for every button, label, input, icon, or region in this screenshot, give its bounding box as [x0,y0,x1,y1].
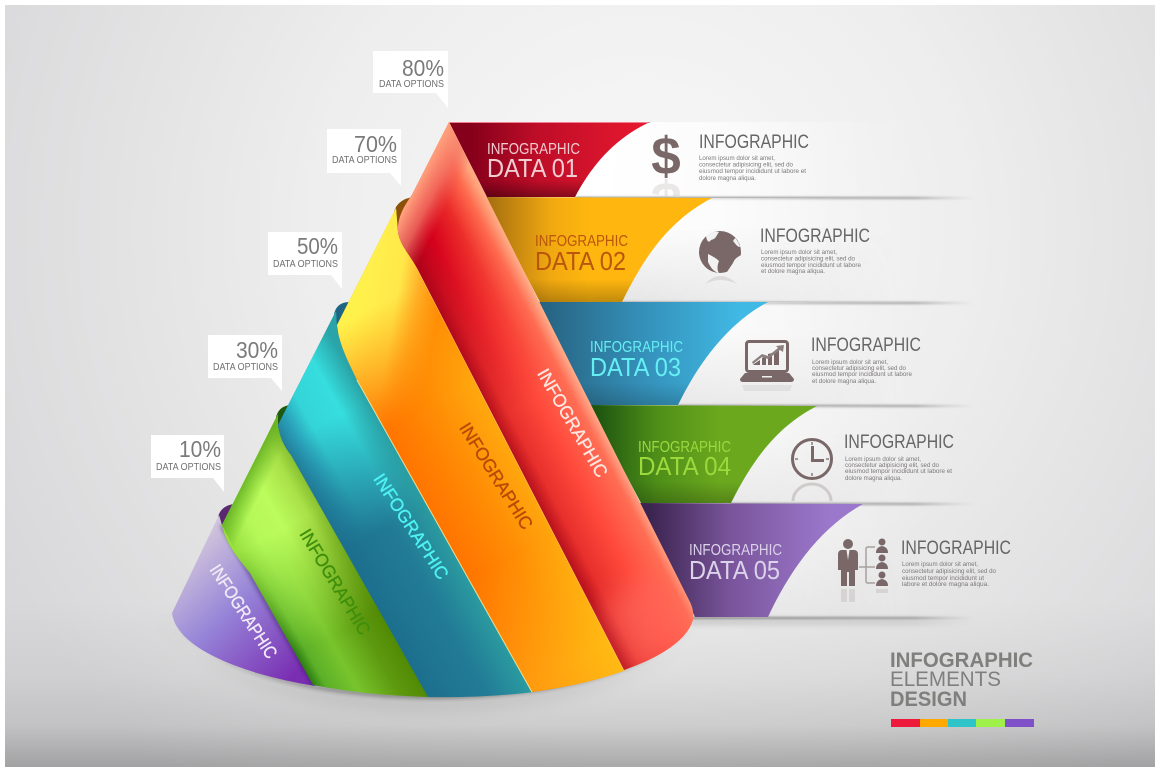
text block 1: consectetur adipisicing elit, sed do [699,162,794,168]
text block 1: eiusmod tempor incididunt ut labore et [699,168,806,175]
text block 2: et dolore magna aliqua. [761,268,825,275]
text block 4 [844,432,954,482]
text block 1 [699,132,809,182]
data 03 label [590,339,683,382]
text block 1: INFOGRAPHIC [699,132,809,153]
text block 3: et dolore magna aliqua. [812,378,876,385]
text block 1: Lorem ipsum dolor sit amet, [699,155,775,162]
callout: 50%: 50% [297,233,338,259]
text block 4: INFOGRAPHIC [844,432,954,453]
title [890,649,1033,711]
data 04 label [638,439,731,481]
orange ribbon label: INFOGRAPHIC [455,419,537,533]
cone ground shadow [165,616,693,709]
data 02 label: INFOGRAPHIC [535,233,628,250]
callout: 10%: 10% [179,436,221,462]
callout: 70%: DATA OPTIONS [332,155,397,166]
red ribbon label: INFOGRAPHIC [533,365,612,481]
text block 4: eiusmod tempor incididunt ut labore et [845,468,952,475]
title: ELEMENTS [890,668,1001,691]
text block 2: INFOGRAPHIC [760,226,870,247]
callout: 80%: 80% [402,55,444,81]
band 4: data 04 [589,405,975,505]
text block 4: Lorem ipsum dolor sit amet, [845,456,921,463]
band 5: data 05 [639,503,975,625]
callout: 30% [208,335,282,391]
data 01 label [487,141,580,183]
callout: 30%: DATA OPTIONS [213,362,278,373]
data 01 label: INFOGRAPHIC [487,141,580,158]
title: DESIGN [890,688,967,711]
data 02 label [535,233,628,276]
data 03 label: DATA 03 [590,352,681,382]
data 04 label: DATA 04 [638,451,731,481]
data 02 label: DATA 02 [535,246,626,276]
icon: dollar: $ [651,127,681,186]
text block 3: consectetur adipisicing elit, sed do [812,365,907,372]
text block 3 [811,335,921,385]
text block 2: eiusmod tempor incididunt ut labore [761,262,862,269]
text block 5: consectetur adipisicing elit, sed do [902,568,997,575]
data 03 label: INFOGRAPHIC [590,339,683,356]
text block 3: eiusmod tempor incididunt ut labore [812,371,913,378]
icon: team hierarchy [838,538,888,602]
text block 5 [901,538,1011,588]
band 2: data 02 [485,197,975,304]
callout: 70%: 70% [354,131,397,157]
callout: 80% [373,51,448,108]
icon: laptop chart [740,342,794,391]
purple ribbon label: INFOGRAPHIC [206,561,281,662]
text block 5: Lorem ipsum dolor sit amet, [902,561,978,568]
text block 2 [760,226,870,275]
text block 2: Lorem ipsum dolor sit amet, [761,249,837,256]
ribbon: teal [278,311,534,698]
text block 2: consectetur adipisicing elit, sed do [761,256,856,262]
text block 5: INFOGRAPHIC [901,538,1011,559]
text block 3: Lorem ipsum dolor sit amet, [812,359,888,366]
title: INFOGRAPHIC [890,649,1033,672]
data 04 label: INFOGRAPHIC [638,439,731,456]
icon: dollar: $ [651,171,681,230]
callout: 30%: 30% [236,337,278,363]
data 05 label [689,542,782,585]
callout: 50% [268,232,342,289]
band 3: data 03 [538,302,975,407]
text block 3: INFOGRAPHIC [811,335,921,356]
ribbon: orange and yellow [330,200,640,700]
icon: globe [699,231,741,284]
colour bar [891,719,1034,727]
ribbon: red [390,115,700,685]
band 1: data 01 [449,122,975,199]
callout: 80%: DATA OPTIONS [379,79,444,90]
callout: 50%: DATA OPTIONS [273,259,338,270]
callout: 10%: DATA OPTIONS [156,462,221,473]
callout: 70% [327,129,401,186]
curl backs [218,197,414,530]
data 01 label: DATA 01 [487,153,578,183]
icon: clock [792,440,832,501]
ribbon: purple [172,515,315,686]
green ribbon label: INFOGRAPHIC [296,525,374,639]
text block 4: dolore magna aliqua. [845,475,902,482]
callout: 10% [151,435,224,492]
teal ribbon label: INFOGRAPHIC [369,470,453,583]
ribbon: green [222,414,428,697]
text block 4: consectetur adipisicing elit, sed do [845,462,940,469]
text block 5: labore et dolore magna aliqua. [902,581,989,588]
data 05 label: INFOGRAPHIC [689,542,782,559]
text block 1: dolore magna aliqua. [699,175,756,182]
text block 5: eiusmod tempor incididunt ut [902,575,984,582]
data 05 label: DATA 05 [689,555,780,585]
